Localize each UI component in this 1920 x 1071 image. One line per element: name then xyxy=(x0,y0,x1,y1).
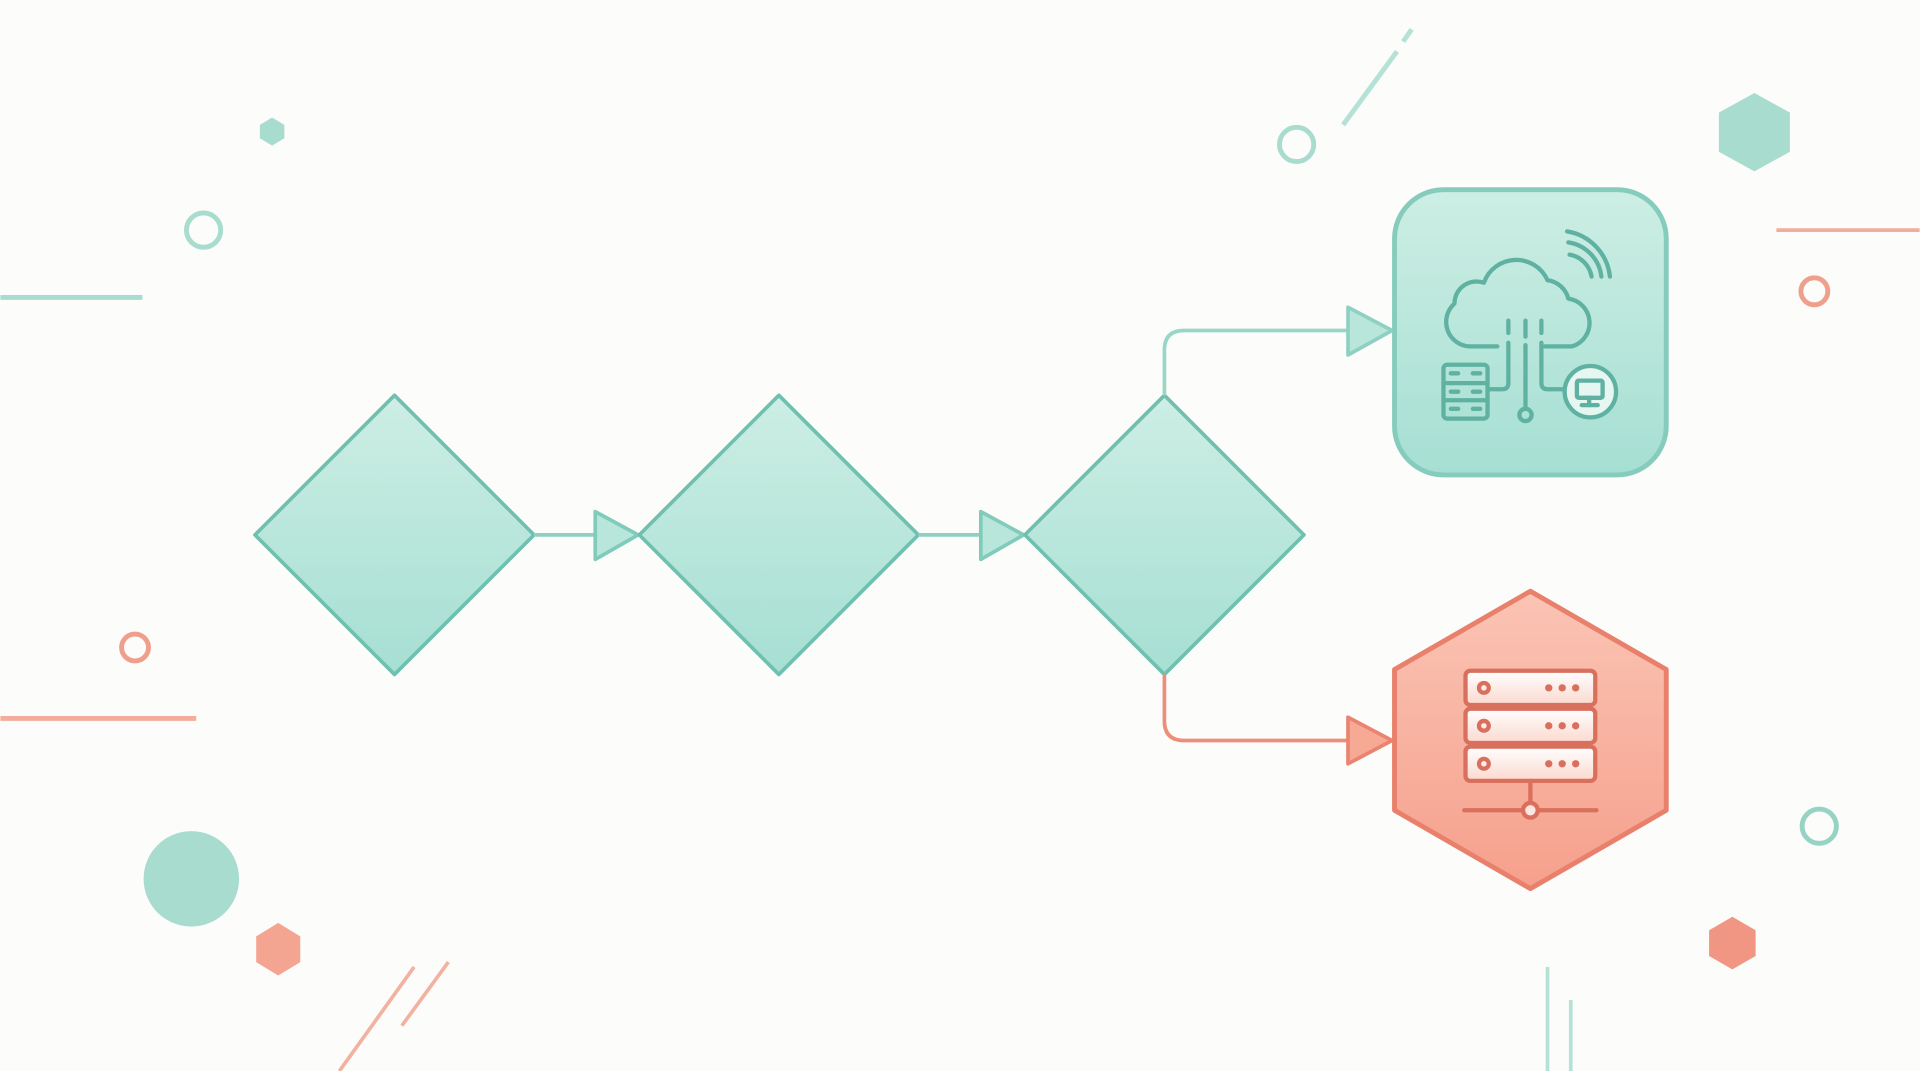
arrow: bottom branch xyxy=(1164,674,1392,764)
icon: server stack xyxy=(1464,671,1596,818)
arrow 2 xyxy=(918,512,1024,559)
panel: server hexagon xyxy=(1395,591,1666,889)
diamond 2 xyxy=(639,395,918,674)
arrow: top branch xyxy=(1164,307,1392,395)
arrow 1 xyxy=(534,512,638,559)
panel: cloud network xyxy=(1395,190,1666,475)
diamond 3 xyxy=(1025,395,1304,674)
diamond 1 xyxy=(255,395,534,674)
icon: cloud with devices xyxy=(1443,231,1616,421)
